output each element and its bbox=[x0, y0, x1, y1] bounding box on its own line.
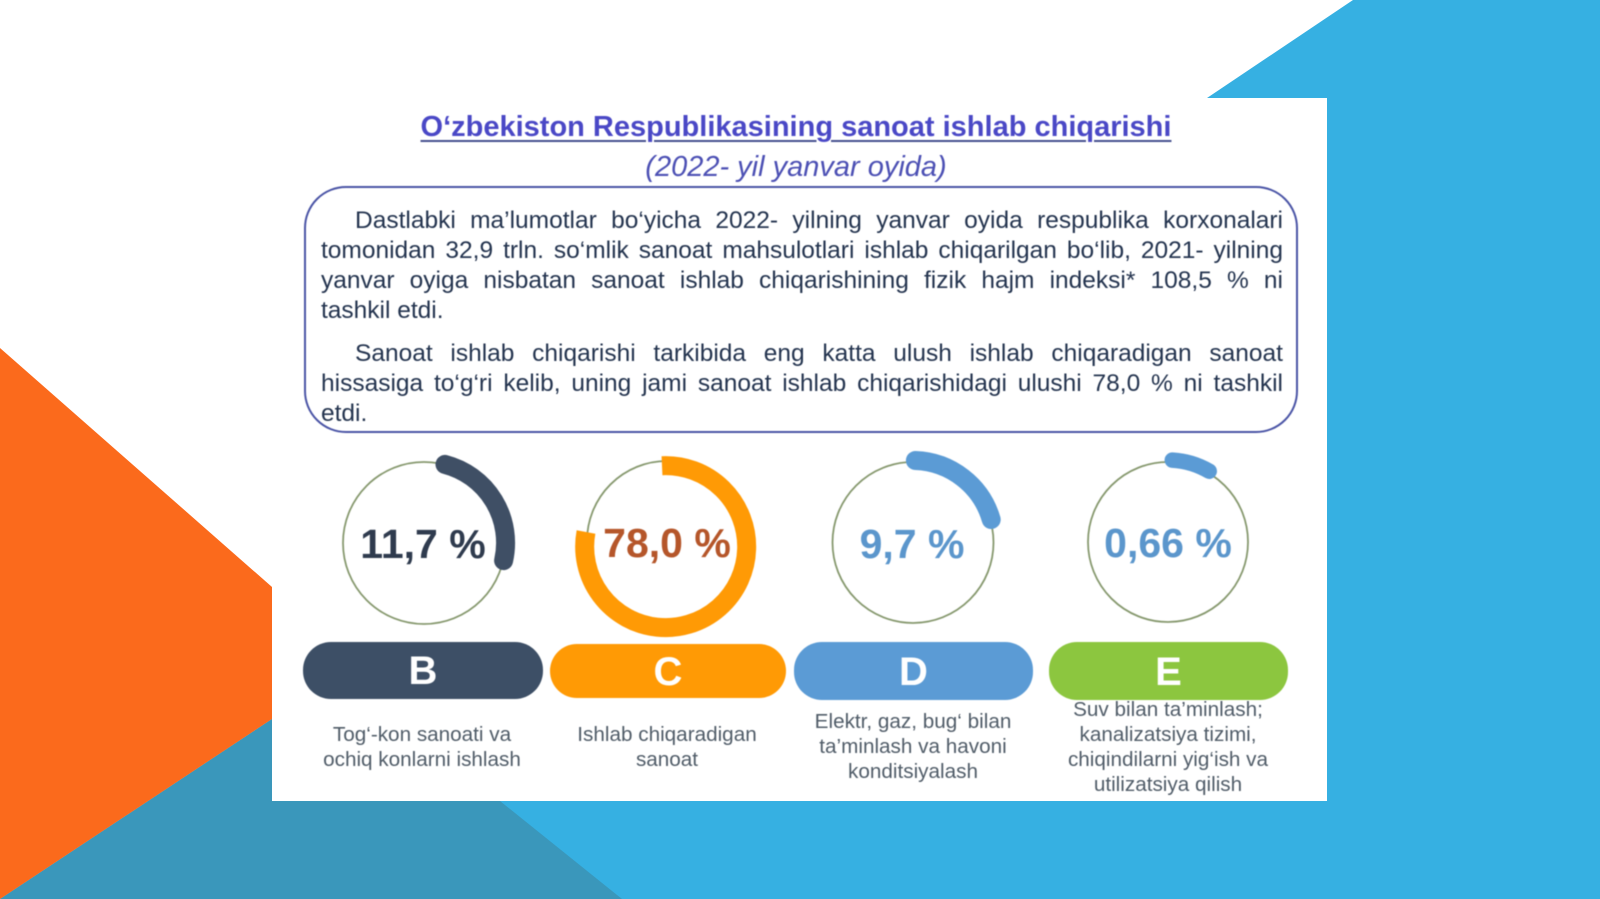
paragraph 1: yanvar oyiga nisbatan sanoat ishlab chiqarishining fizik hajm indeksi* 108,5 % ni bbox=[321, 267, 1283, 294]
label pill D bbox=[794, 642, 1033, 700]
caption C: sanoat bbox=[636, 748, 698, 771]
paragraph 2: Sanoat ishlab chiqarishi tarkibida eng katta ulush ishlab chiqaradigan sanoat bbox=[355, 340, 1283, 367]
value B: 11,7 % bbox=[360, 521, 486, 567]
caption C: Ishlab chiqaradigan bbox=[577, 723, 757, 746]
caption D: Elektr, gaz, bug‘ bilan bbox=[815, 710, 1011, 733]
caption E: chiqindilarni yig‘ish va bbox=[1068, 748, 1268, 771]
subtitle: (2022- yil yanvar oyida) bbox=[645, 151, 947, 183]
caption E: kanalizatsiya tizimi, bbox=[1079, 723, 1257, 746]
caption D: ta’minlash va havoni bbox=[819, 735, 1007, 758]
paragraph 1: Dastlabki ma’lumotlar bo‘yicha 2022- yilning yanvar oyida respublika korxonalari bbox=[355, 207, 1283, 234]
paragraph 1: tashkil etdi. bbox=[321, 297, 444, 324]
caption B: ochiq konlarni ishlash bbox=[323, 748, 521, 771]
gauge B bbox=[343, 462, 506, 624]
paragraph 1: tomonidan 32,9 trln. so‘mlik sanoat mahsulotlari ishlab chiqarilgan bo‘lib, 2021- yilning bbox=[321, 237, 1283, 264]
value D: 9,7 % bbox=[860, 521, 964, 567]
caption E bbox=[1068, 698, 1269, 796]
label pill B bbox=[303, 642, 543, 699]
gauge D bbox=[832, 460, 994, 623]
label pill B: B bbox=[409, 649, 437, 693]
caption E: Suv bilan ta’minlash; bbox=[1073, 698, 1263, 721]
label pill C bbox=[550, 644, 786, 698]
rounded text box bbox=[304, 186, 1298, 433]
caption B bbox=[323, 723, 521, 771]
label pill C: C bbox=[654, 650, 682, 694]
paragraph 1 bbox=[320, 207, 1283, 324]
white content panel bbox=[272, 98, 1327, 801]
orange shape bbox=[0, 348, 272, 899]
caption B: Tog‘-kon sanoati va bbox=[333, 723, 511, 746]
value E: 0,66 % bbox=[1104, 520, 1232, 566]
label pill E bbox=[1049, 642, 1288, 700]
caption D: konditsiyalash bbox=[848, 760, 978, 783]
caption C bbox=[577, 723, 757, 771]
dark teal band bbox=[0, 719, 622, 899]
paragraph 2: etdi. bbox=[321, 400, 367, 427]
label pill E: E bbox=[1155, 650, 1182, 694]
caption E: utilizatsiya qilish bbox=[1094, 773, 1242, 796]
gauge C bbox=[585, 461, 747, 628]
paragraph 2: hissasiga to‘g‘ri kelib, uning jami sanoat ishlab chiqarishidagi ulushi 78,0 % ni tashkil bbox=[321, 370, 1283, 397]
gauge E bbox=[1088, 460, 1248, 622]
caption D bbox=[815, 710, 1011, 783]
title: O‘zbekiston Respublikasining sanoat ishlab chiqarishi bbox=[421, 111, 1171, 143]
label pill D: D bbox=[899, 650, 928, 694]
paragraph 2 bbox=[321, 340, 1284, 427]
value C: 78,0 % bbox=[603, 520, 731, 566]
